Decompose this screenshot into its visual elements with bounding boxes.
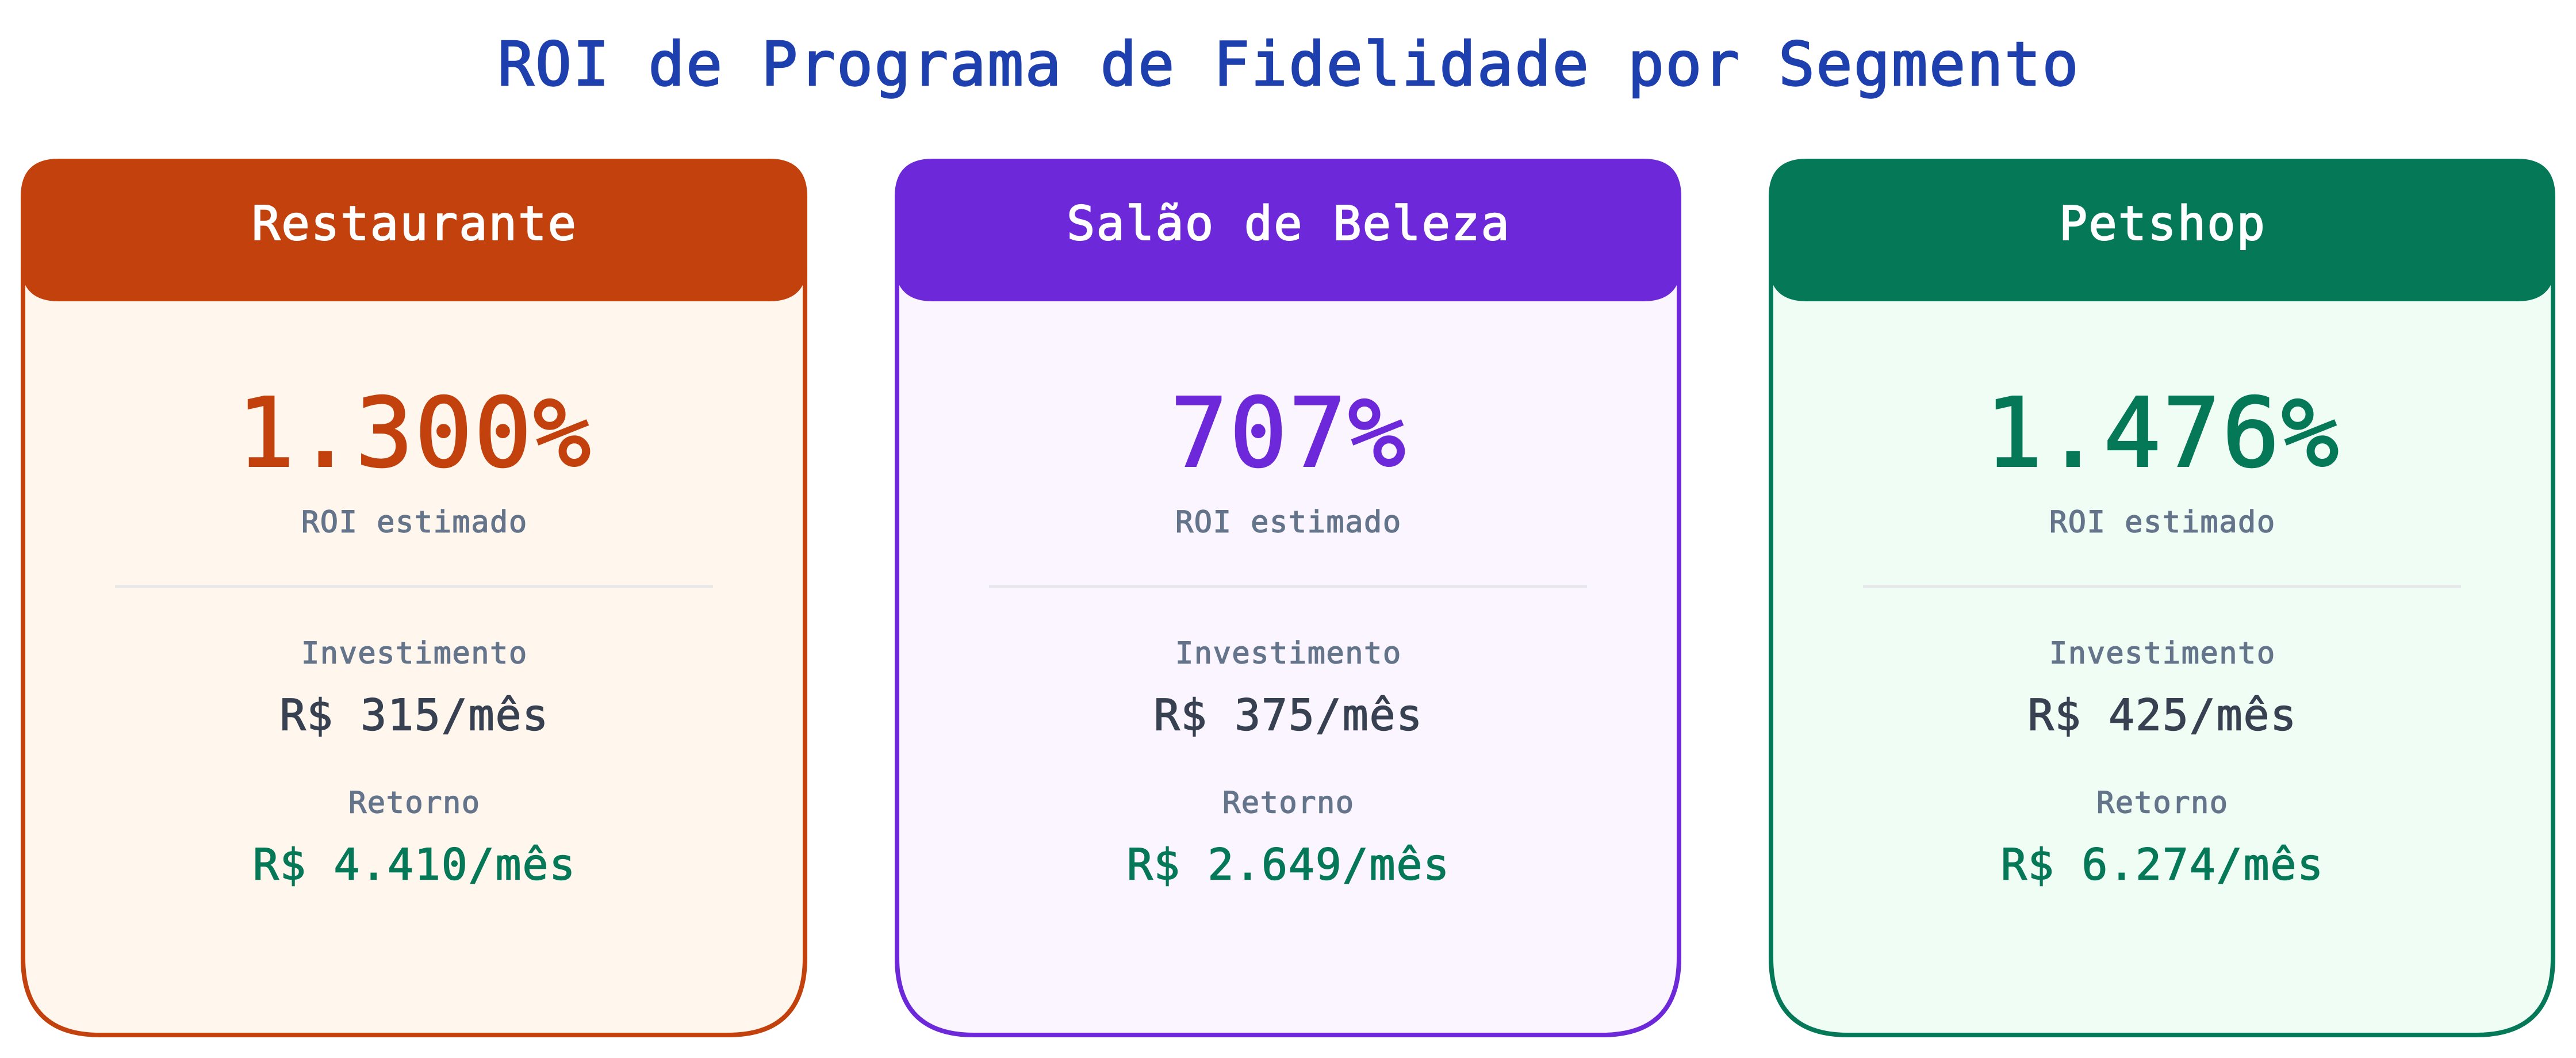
panel: Salão de Beleza <box>895 159 1681 1035</box>
ROI label: ROI estimado <box>301 505 528 539</box>
card header <box>895 159 1681 301</box>
segment name: Salão de Beleza <box>1067 197 1511 251</box>
return label: Retorno <box>1222 785 1355 820</box>
investment label: Investimento <box>2049 636 2276 670</box>
title: ROI de Programa de Fidelidade por Segmento <box>497 29 2080 99</box>
investment label: Investimento <box>1175 636 1402 670</box>
return value: R$ 2.649/mês <box>1127 839 1450 890</box>
return value: R$ 6.274/mês <box>2001 839 2324 890</box>
ROI value: 707% <box>1170 378 1408 489</box>
return value: R$ 4.410/mês <box>253 839 576 890</box>
ROI value: 1.476% <box>1985 378 2341 489</box>
investment label: Investimento <box>301 636 528 670</box>
card header <box>1769 159 2555 301</box>
segment name: Petshop <box>2059 197 2266 251</box>
card header <box>21 159 807 301</box>
card background <box>1771 161 2553 1035</box>
investment value: R$ 425/mês <box>2028 689 2297 740</box>
card background <box>897 161 1679 1035</box>
investment value: R$ 315/mês <box>280 689 549 740</box>
panel: Petshop <box>1769 159 2555 1035</box>
ROI value: 1.300% <box>237 378 593 489</box>
segment name: Restaurante <box>252 197 577 251</box>
card background <box>23 161 805 1035</box>
panel: Restaurante <box>21 159 807 1035</box>
return label: Retorno <box>2096 785 2229 820</box>
investment value: R$ 375/mês <box>1154 689 1423 740</box>
return label: Retorno <box>348 785 481 820</box>
ROI label: ROI estimado <box>2049 505 2276 539</box>
ROI label: ROI estimado <box>1175 505 1402 539</box>
